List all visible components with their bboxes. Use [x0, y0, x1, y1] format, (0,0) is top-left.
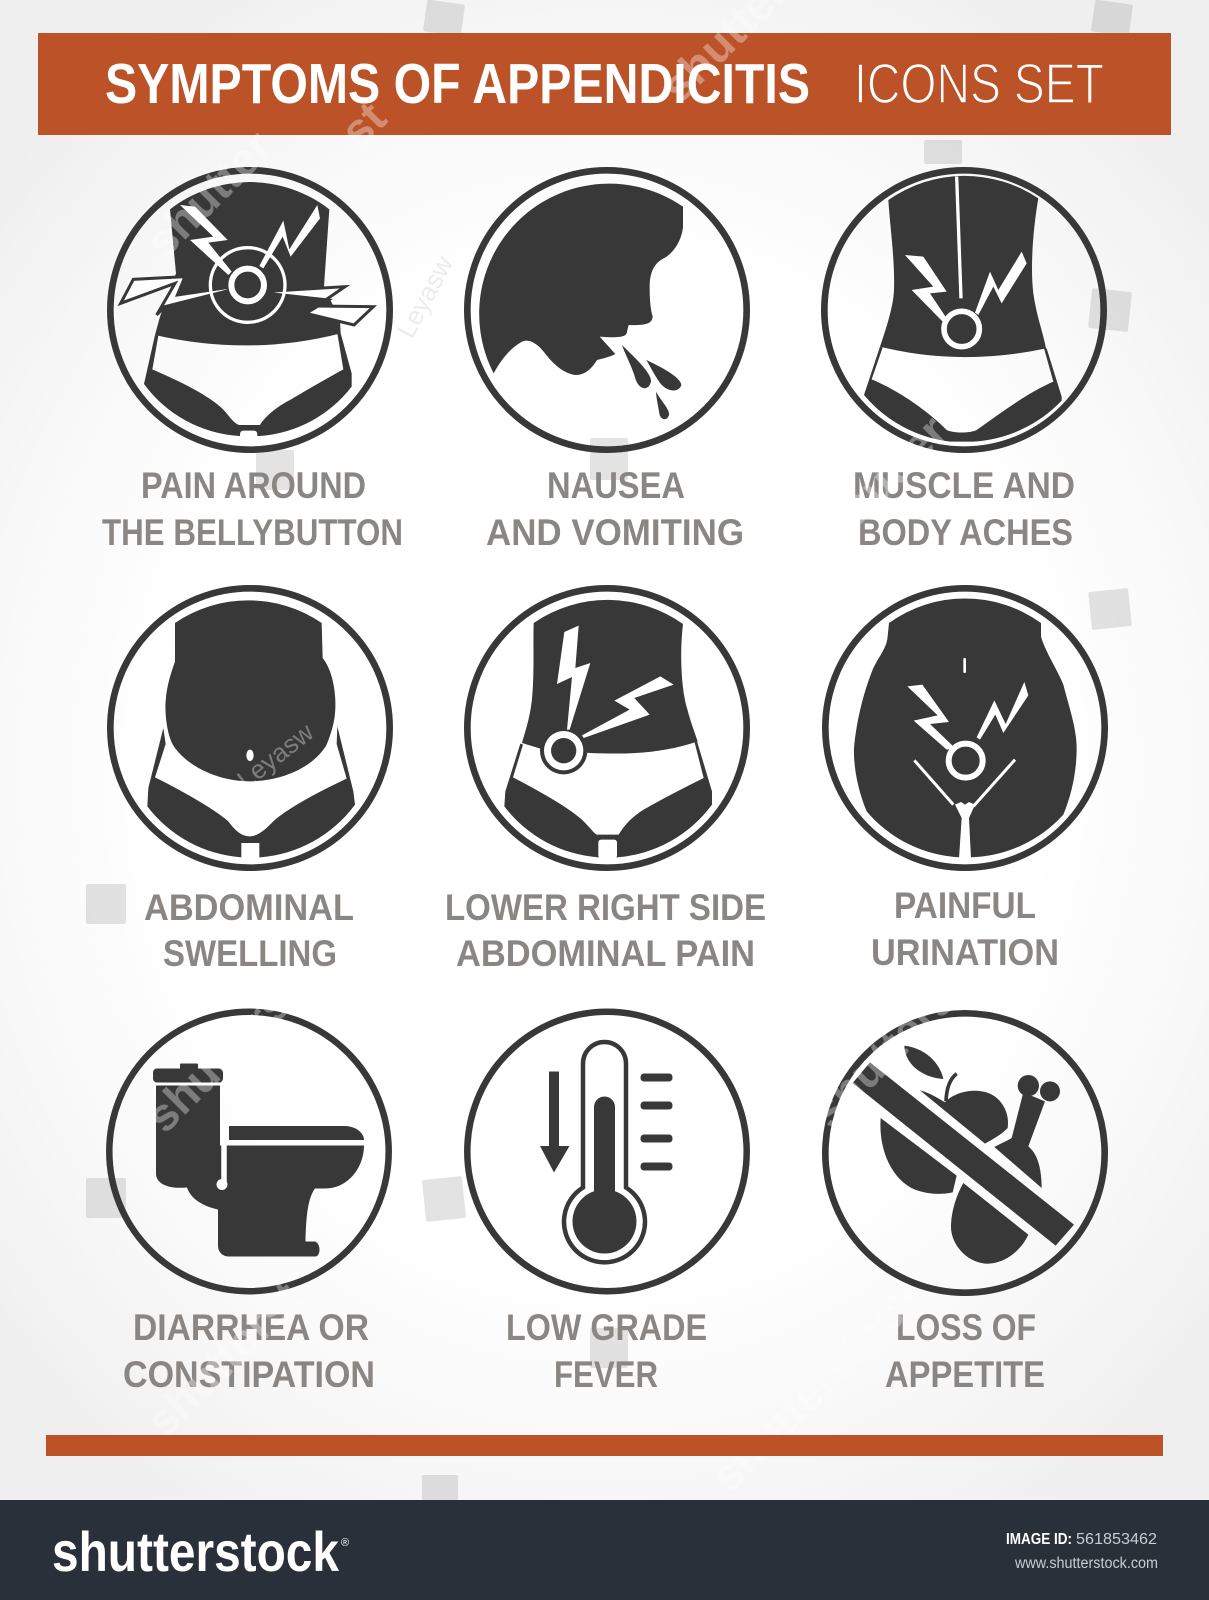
text: shutterstock	[700, 1270, 933, 1502]
icon: head in profile vomiting	[467, 170, 747, 450]
label: MUSCLE AND	[853, 465, 1075, 506]
image id: IMAGE ID:	[1006, 1531, 1072, 1548]
label	[506, 1307, 707, 1395]
title banner	[38, 33, 1171, 135]
label	[123, 1307, 375, 1395]
label: AND VOMITING	[486, 512, 744, 553]
panel: loss of appetite	[825, 1013, 1105, 1395]
icon: torso with pain radiating from navel	[110, 170, 390, 450]
label: LOSS OF	[896, 1307, 1036, 1348]
text: shutterst	[800, 961, 976, 1137]
panel: painful urination	[825, 588, 1105, 973]
footer	[0, 1500, 1209, 1600]
icon: thermometer with falling arrow	[467, 1012, 747, 1291]
subtitle: icons set: ICONS SET	[854, 52, 1104, 116]
registered mark: ®	[341, 1537, 349, 1549]
panel: pain around the bellybutton	[102, 170, 403, 553]
icon: lower body with pain at bladder	[825, 588, 1105, 868]
title: symptoms of appendicitis: SYMPTOMS OF APPENDICITIS	[105, 52, 810, 116]
label: FEVER	[554, 1354, 658, 1395]
label: ABDOMINAL PAIN	[456, 933, 755, 974]
text: shutterst	[135, 1271, 311, 1447]
label	[885, 1307, 1045, 1395]
text: shutterst	[135, 966, 311, 1142]
site url: www.shutterstock.com	[1014, 1555, 1158, 1572]
text: st	[330, 91, 396, 157]
label: PAINFUL	[894, 885, 1036, 926]
label: LOW GRADE	[506, 1307, 707, 1348]
panel: diarrhea or constipation	[109, 1012, 389, 1395]
icon: torso with midline and pain bolts	[824, 170, 1104, 450]
panel: abdominal swelling	[110, 588, 390, 974]
label: SWELLING	[163, 933, 337, 974]
label: DIARRHEA OR	[133, 1307, 369, 1348]
text: Leyasw	[231, 717, 319, 795]
label	[871, 885, 1059, 973]
label	[853, 465, 1075, 553]
panel: lower right side abdominal pain	[445, 588, 766, 974]
panel: nausea and vomiting	[467, 170, 747, 553]
panel: low grade fever	[467, 1012, 747, 1395]
label	[445, 887, 766, 974]
label: THE BELLYBUTTON	[102, 512, 403, 553]
icon: toilet	[109, 1012, 389, 1291]
label	[144, 887, 354, 974]
label: URINATION	[871, 932, 1059, 973]
accent bar	[46, 1435, 1163, 1456]
text: shutterst	[810, 376, 986, 552]
icon: torso with pain at lower right	[467, 588, 747, 868]
icon: crossed out food	[825, 1013, 1105, 1293]
text: shutter	[135, 120, 282, 267]
label: BODY ACHES	[858, 512, 1073, 553]
label	[102, 465, 403, 553]
panel: muscle and body aches	[824, 170, 1104, 553]
label: CONSTIPATION	[123, 1354, 375, 1395]
logo wordmark: shutterstock	[52, 1520, 340, 1583]
text: Leyasw	[391, 251, 459, 343]
label: APPETITE	[885, 1354, 1045, 1395]
icon: swollen belly	[110, 588, 390, 868]
label: LOWER RIGHT SIDE	[445, 887, 766, 928]
label: ABDOMINAL	[144, 887, 354, 928]
label	[486, 465, 744, 553]
image number: 561853462	[1076, 1531, 1157, 1548]
label: PAIN AROUND	[141, 465, 366, 506]
label: NAUSEA	[547, 465, 685, 506]
